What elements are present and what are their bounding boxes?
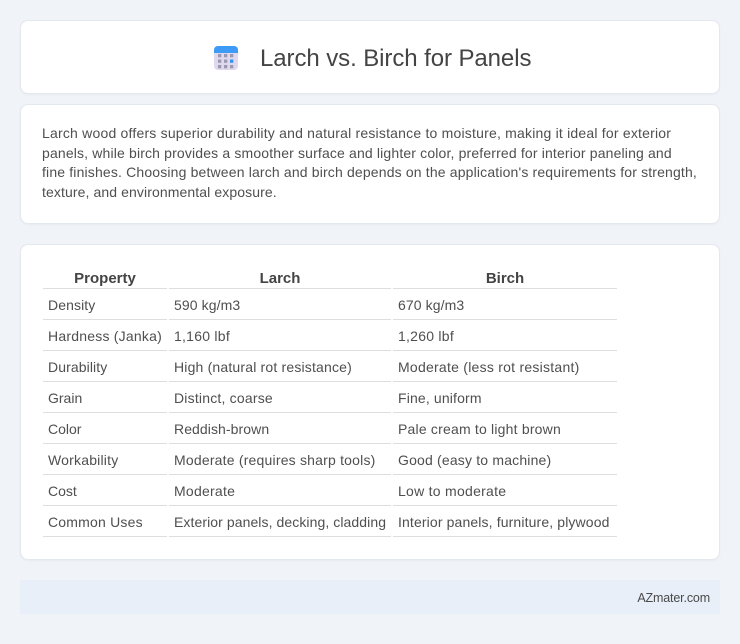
icon: calendar [214,46,238,70]
row: density: 590 kg/m3 [174,297,240,313]
header row: Larch [260,270,300,286]
row: durability: Moderate (less rot resistant) [398,359,580,375]
row: durability: Durability [48,359,107,375]
row: common uses: Exterior panels, decking, cladding [174,514,386,530]
row: density: Density [48,297,95,313]
row: hardness [43,328,617,351]
row: workability: Workability [48,452,118,468]
row: grain: Grain [48,390,82,406]
row: workability [43,452,617,475]
title: Larch vs. Birch for Panels [260,45,531,72]
row: hardness: Hardness (Janka) [48,328,162,344]
header row: Property [74,270,136,286]
row: common uses: Common Uses [48,514,143,530]
table panel [20,244,720,560]
header row [43,270,617,289]
row: density [43,297,617,320]
intro text: Larch wood offers superior durability and natural resistance to moisture, making it ideal for exterior [42,125,671,141]
row: color: Reddish-brown [174,421,269,437]
row: grain [43,390,617,413]
header row: Birch [486,270,524,286]
row: hardness: 1,260 lbf [398,328,454,344]
row: color: Pale cream to light brown [398,421,561,437]
intro text: panels, while birch provides a smoother surface and lighter color, preferred for interior paneling and [42,145,672,161]
comparison table [43,270,617,537]
row: density: 670 kg/m3 [398,297,464,313]
row: workability: Moderate (requires sharp tools) [174,452,376,468]
row: durability [43,359,617,382]
row: cost: Moderate [174,483,235,499]
row: common uses: Interior panels, furniture, plywood [398,514,610,530]
row: cost: Cost [48,483,77,499]
intro text [42,125,697,200]
row: hardness: 1,160 lbf [174,328,230,344]
row: grain: Fine, uniform [398,390,482,406]
footer credit: AZmater.com [637,590,710,604]
row: color [43,421,617,444]
intro text: texture, and environmental exposure. [42,184,277,200]
footer bar [20,580,720,614]
row: workability: Good (easy to machine) [398,452,551,468]
row: durability: High (natural rot resistance) [174,359,352,375]
intro text: fine finishes. Choosing between larch and birch depends on the application's requirements for strength, [42,164,697,180]
row: grain: Distinct, coarse [174,390,273,406]
intro panel [20,104,720,224]
row: cost [43,483,617,506]
row: common uses [43,514,617,537]
row: color: Color [48,421,81,437]
row: cost: Low to moderate [398,483,506,499]
header panel [20,20,720,94]
